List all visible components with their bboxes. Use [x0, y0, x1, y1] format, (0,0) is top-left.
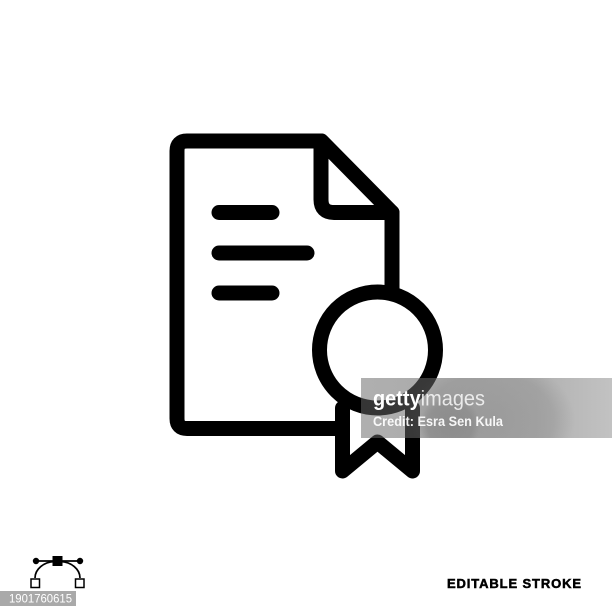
- watermark shading: [420, 378, 564, 438]
- document outline: [177, 141, 392, 428]
- bezier curve: [35, 562, 80, 578]
- bezier handle line: [36, 560, 80, 562]
- image id badge: [0, 591, 76, 606]
- infographic canvas: [0, 134, 612, 606]
- icon: document with award ribbon: [177, 141, 436, 471]
- text line 2: [219, 246, 307, 260]
- image id: 1901760615: [9, 592, 72, 606]
- right handle dot: [77, 558, 83, 564]
- award ribbon: [342, 408, 412, 471]
- text line 1: [219, 205, 272, 220]
- watermark logo: gettyimages: [373, 388, 485, 410]
- watermark background: [361, 378, 612, 438]
- badge background: [0, 591, 76, 606]
- award seal circle: [320, 292, 436, 408]
- folded corner: [321, 141, 392, 212]
- text line 3: [219, 286, 272, 300]
- left anchor square: [31, 579, 40, 588]
- right anchor square: [76, 579, 84, 588]
- center anchor square: [53, 556, 62, 566]
- watermark credit: Credit: Esra Sen Kula: [373, 414, 503, 429]
- editable stroke label: EDITABLE STROKE: [447, 576, 581, 591]
- watermark band: [361, 378, 612, 438]
- icon: bezier curve editing tool: [31, 556, 84, 588]
- left handle dot: [33, 558, 39, 564]
